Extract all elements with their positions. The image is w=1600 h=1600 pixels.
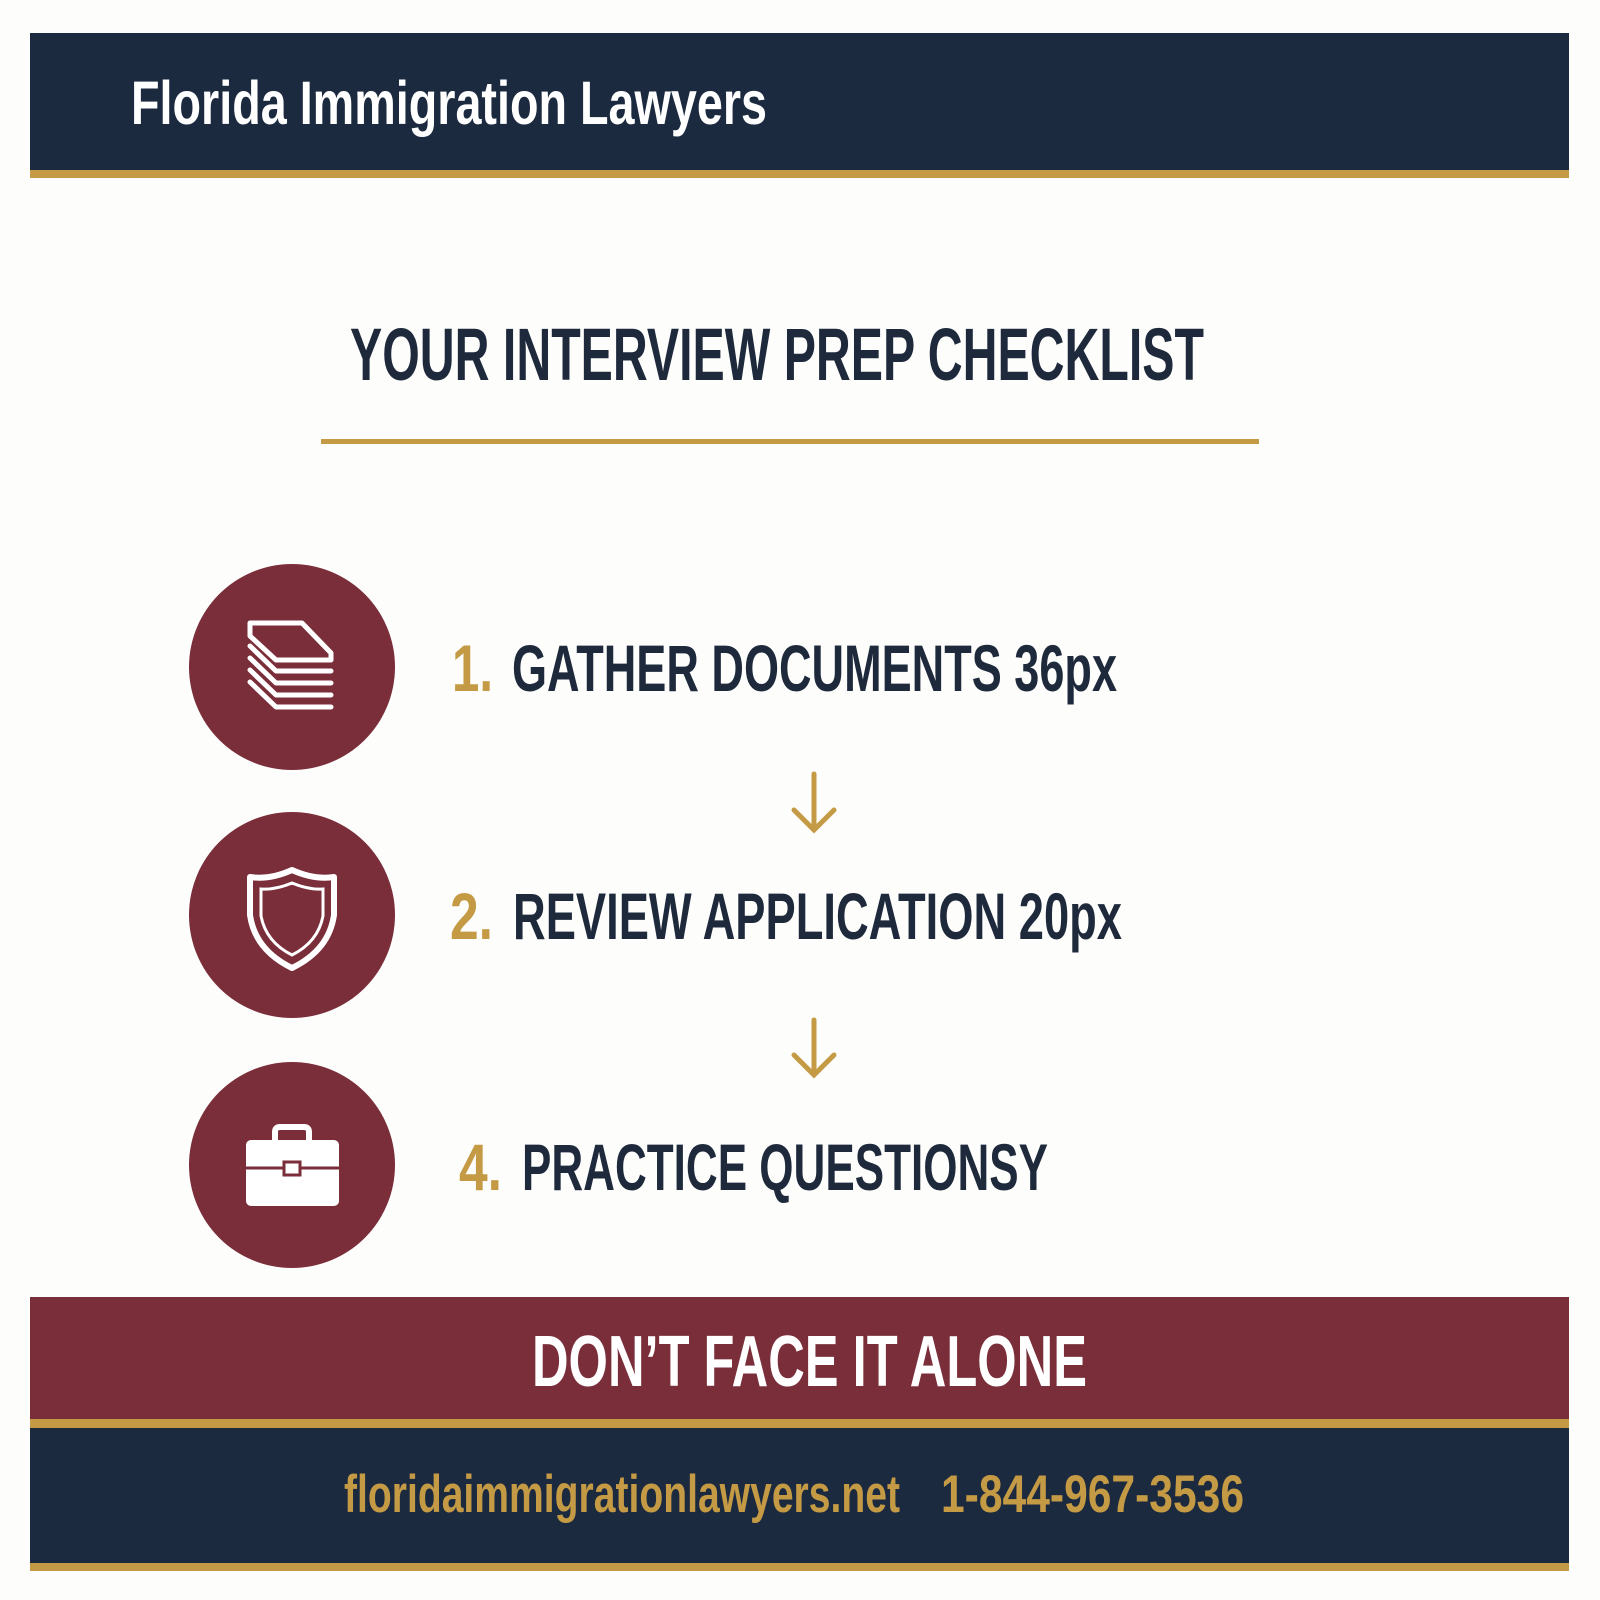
step 3 — [189, 1062, 1048, 1268]
step 2 label: REVIEW APPLICATION 20px — [513, 879, 1122, 953]
phone: 1-844-967-3536 — [941, 1465, 1244, 1524]
step 2 label — [450, 879, 1122, 953]
step 1 label: 1. — [452, 631, 493, 705]
footer contact bar — [30, 1428, 1569, 1571]
header bar — [30, 33, 1569, 178]
arrow 2 — [794, 1020, 834, 1075]
step 2 — [189, 812, 1122, 1018]
cta banner — [30, 1297, 1569, 1428]
title underline — [321, 439, 1259, 444]
arrow 1 — [794, 774, 834, 830]
icon: documents — [189, 564, 395, 770]
step 2 label: 2. — [450, 879, 493, 953]
cta text: DON’T FACE IT ALONE — [532, 1322, 1087, 1402]
step 1 label: GATHER DOCUMENTS 36px — [512, 631, 1117, 705]
icon: shield — [189, 812, 395, 1018]
step 1 — [189, 564, 1117, 770]
header title: Florida Immigration Lawyers — [131, 69, 767, 137]
step 3 label: PRACTICE QUESTIONSY — [522, 1130, 1048, 1204]
step 1 label — [452, 631, 1117, 705]
step 3 label: 4. — [459, 1130, 502, 1204]
icon: briefcase — [189, 1062, 395, 1268]
website: floridaimmigrationlawyers.net — [344, 1465, 900, 1524]
step 3 label — [459, 1130, 1048, 1204]
